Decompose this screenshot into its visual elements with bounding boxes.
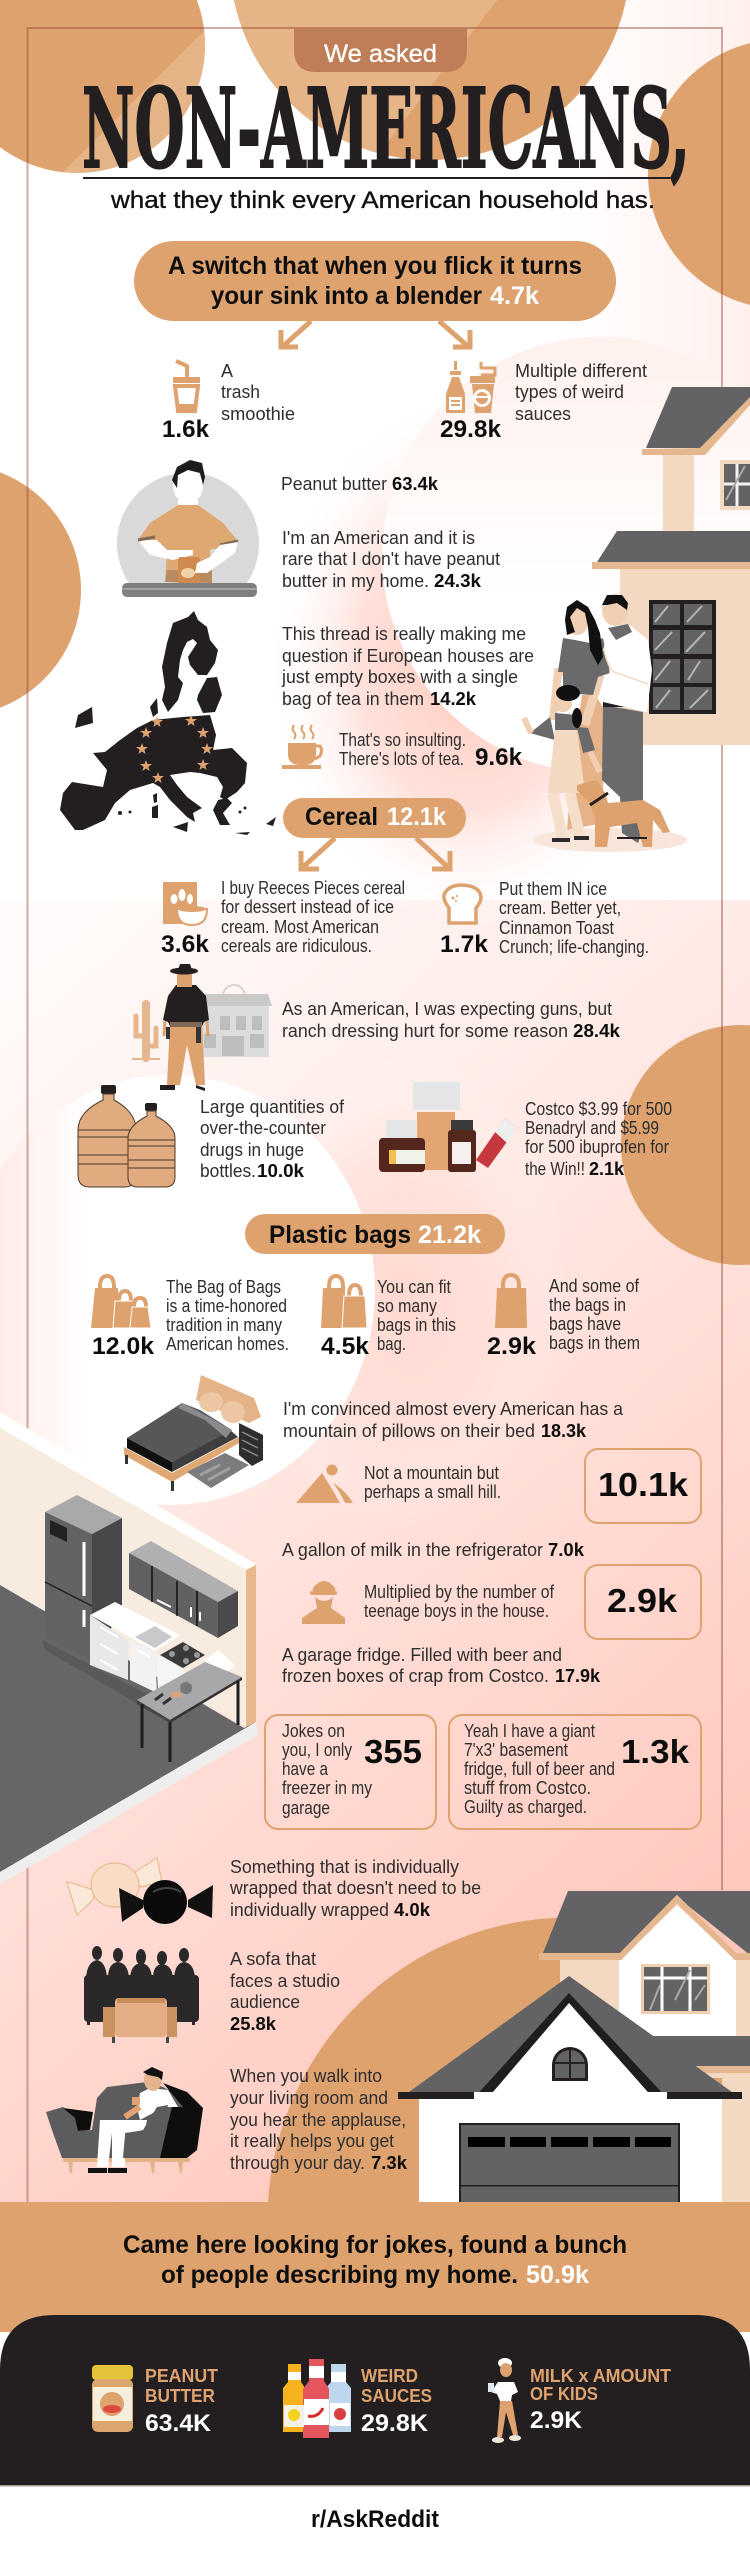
illustration: isometric kitchen	[0, 1412, 258, 1884]
item: weird sauces: 29.8k	[440, 416, 502, 443]
text: garage fridge	[282, 1645, 601, 1686]
text: ranch dressing	[282, 999, 621, 1041]
heading pill: sink blender	[134, 241, 616, 321]
callout: freezer 355	[265, 1715, 436, 1829]
text: applause: it really helps you get	[230, 2131, 394, 2151]
item: many bags: You can fit	[377, 1277, 451, 1297]
text: european houses: question if European houses are	[282, 646, 534, 666]
heading pill: cereal: 12.1k	[387, 803, 446, 831]
heading pill: plastic bags: 21.2k	[418, 1221, 481, 1249]
item: trash smoothie: trash	[221, 382, 260, 402]
text: OTC drugs: Large quantities of	[200, 1097, 345, 1117]
heading pill: cereal	[283, 798, 466, 838]
text: teenage boys: teenage boys in the house.	[364, 1601, 549, 1621]
stat: weird sauces	[283, 2359, 432, 2438]
text: individually wrapped: Something that is individually	[230, 1857, 459, 1877]
icon: three bags	[91, 1276, 151, 1328]
we asked tab	[294, 28, 467, 72]
text: european houses: This thread is really making me	[282, 624, 526, 644]
icon: bread	[444, 885, 481, 923]
text: ranch dressing: 28.4k	[573, 1021, 621, 1041]
text: OTC drugs: over-the-counter	[200, 1118, 326, 1138]
callout: freezer 355: 355	[364, 1733, 422, 1770]
icon: peanut butter jar	[92, 2365, 133, 2432]
callout: basement fridge 1.3k: fridge, full of beer and	[464, 1759, 615, 1779]
callout: 10.1k: 10.1k	[598, 1466, 689, 1503]
item: Reeces Pieces cereal: for dessert instead of ice	[221, 897, 394, 917]
callout: freezer 355: freezer in my	[282, 1778, 372, 1798]
callout: freezer 355: you, I only	[282, 1740, 352, 1760]
item: trash smoothie	[162, 361, 295, 443]
stat: peanut butter: BUTTER	[145, 2386, 215, 2406]
stat: peanut butter: PEANUT	[145, 2366, 218, 2386]
text: applause: your living room and	[230, 2088, 388, 2108]
icon: small hill	[296, 1464, 353, 1503]
text: garage fridge: frozen boxes of crap from Costco.	[282, 1666, 549, 1686]
text: small hill: Not a mountain but	[364, 1463, 499, 1483]
item: bags in bags: bags in them	[549, 1333, 640, 1353]
illustration: house with family	[524, 387, 750, 852]
text: studio audience: audience	[230, 1992, 300, 2012]
item: bag of bags: tradition in many	[166, 1315, 282, 1335]
stat: milk	[488, 2358, 671, 2443]
text: mountain of pillows: I'm convinced almost every American has a	[283, 1399, 624, 1419]
text: individually wrapped: individually wrapped	[230, 1900, 389, 1920]
item: many bags: 4.5k	[321, 1333, 370, 1360]
icon: sauce bottles	[283, 2359, 351, 2438]
text: applause: you hear the applause,	[230, 2110, 406, 2130]
illustration: huge bottles	[78, 1085, 175, 1187]
item: bag of bags: The Bag of Bags	[166, 1277, 281, 1297]
text: ranch dressing: As an American, I was expecting guns, but	[282, 999, 612, 1019]
stat: milk: MILK x AMOUNT	[530, 2366, 671, 2386]
item: weird sauces	[440, 361, 647, 443]
text: teenage boys	[364, 1582, 555, 1621]
text: mountain of pillows	[283, 1399, 624, 1441]
text: tea comment: 9.6k	[475, 744, 523, 771]
text: Costco medicine	[525, 1099, 672, 1179]
item: many bags: bag.	[377, 1334, 406, 1354]
text: european houses: 14.2k	[430, 689, 477, 709]
panel: top results	[0, 2315, 750, 2486]
item: bag of bags	[91, 1276, 289, 1360]
item: cereal in ice cream: Crunch; life-changing.	[499, 937, 649, 957]
text: american peanut comment: butter in my home.	[282, 571, 429, 591]
text: mountain of pillows: 18.3k	[541, 1421, 587, 1441]
illustration: house with garage	[398, 1891, 750, 2203]
text: studio audience: faces a studio	[230, 1971, 340, 1991]
text: studio audience	[230, 1949, 340, 2034]
text: individually wrapped	[229, 1857, 481, 1920]
text: OTC drugs: bottles.	[200, 1161, 256, 1181]
item: weird sauces: sauces	[515, 404, 571, 424]
icon: cereal box	[163, 882, 207, 925]
item: weird sauces: Multiple different	[515, 361, 647, 381]
item: bags in bags: the bags in	[549, 1295, 626, 1315]
item: bags in bags: And some of	[549, 1276, 640, 1296]
arrows from sink heading	[281, 321, 470, 348]
stat: weird sauces: SAUCES	[361, 2386, 432, 2406]
text: gallon of milk: A gallon of milk in the refrigerator	[282, 1540, 543, 1560]
text: OTC drugs	[200, 1097, 345, 1181]
text: individually wrapped: 4.0k	[394, 1900, 431, 1920]
stat: weird sauces: 29.8K	[361, 2410, 429, 2437]
illustration: cowboy and saloon	[132, 964, 272, 1091]
icon: one bag	[495, 1275, 527, 1328]
text: OTC drugs: 10.0k	[257, 1161, 305, 1181]
text: ranch dressing: ranch dressing hurt for some reason	[282, 1021, 568, 1041]
icon: smoothie cup	[173, 361, 200, 411]
heading pill: plastic bags: Plastic bags	[269, 1221, 411, 1249]
heading pill: sink blender: A switch that when you flick it turns	[168, 252, 582, 280]
callout: basement fridge 1.3k: Guilty as charged.	[464, 1797, 587, 1817]
heading pill: sink blender: your sink into a blender	[211, 282, 482, 310]
item: bag of bags: American homes.	[166, 1334, 289, 1354]
text: OTC drugs: drugs in huge	[200, 1140, 304, 1160]
item: Reeces Pieces cereal: cream. Most American	[221, 917, 379, 937]
text: european houses: bag of tea in them	[282, 689, 424, 709]
text: garage fridge: A garage fridge. Filled with beer and	[282, 1645, 562, 1665]
text: peanut butter: 63.4k	[392, 474, 439, 494]
icon: tea cup	[282, 725, 322, 769]
item: Reeces Pieces cereal: I buy Reeces Pieces cereal	[221, 878, 405, 898]
stat: milk: 2.9K	[530, 2407, 583, 2434]
illustration: wrapped candies	[67, 1858, 213, 1924]
callout: freezer 355: Jokes on	[282, 1721, 345, 1741]
arrows from cereal heading	[301, 838, 450, 869]
subtitle: what they think every American household has.	[110, 187, 655, 214]
heading pill: plastic bags	[245, 1214, 505, 1254]
callout: basement fridge 1.3k	[449, 1715, 701, 1829]
illustration: medicine bottles	[379, 1082, 517, 1172]
band: conclusion: of people describing my home.	[161, 2261, 518, 2289]
text: gallon of milk: 7.0k	[548, 1540, 585, 1560]
item: cereal in ice cream: cream. Better yet,	[499, 898, 621, 918]
item: cereal in ice cream: 1.7k	[440, 931, 489, 958]
item: Reeces Pieces cereal: cereals are ridiculous.	[221, 936, 372, 956]
item: Reeces Pieces cereal: 3.6k	[161, 931, 210, 958]
text: small hill	[364, 1463, 501, 1502]
text: european houses	[281, 624, 534, 709]
source: r/AskReddit	[311, 2506, 439, 2533]
text: Costco medicine: the Win!!	[525, 1159, 585, 1179]
frame	[28, 28, 722, 2202]
stat: milk: OF KIDS	[530, 2384, 598, 2404]
item: many bags	[321, 1276, 456, 1360]
illustration: man opening peanut butter	[117, 460, 259, 597]
band: conclusion	[0, 2202, 750, 2332]
text: american peanut comment: 24.3k	[434, 571, 482, 591]
text: mountain of pillows: mountain of pillows on their bed	[283, 1421, 535, 1441]
icon: two bags	[321, 1276, 367, 1328]
map: Europe with stars	[60, 611, 276, 835]
stat: peanut butter	[92, 2365, 218, 2437]
item: many bags: bags in this	[377, 1315, 456, 1335]
text: Costco medicine: for 500 ibuprofen for	[525, 1137, 669, 1157]
item: cereal in ice cream: Put them IN ice	[499, 879, 607, 899]
text: Costco medicine: Benadryl and $5.99	[525, 1118, 659, 1138]
icon: boy drinking milk	[488, 2358, 521, 2443]
text: applause: through your day.	[230, 2153, 365, 2173]
text: tea comment: That's so insulting.	[339, 730, 466, 750]
text: american peanut comment	[282, 528, 500, 591]
family	[524, 594, 687, 852]
item: Reeces Pieces cereal	[161, 878, 405, 958]
text: studio audience: 25.8k	[230, 2014, 277, 2034]
item: trash smoothie: smoothie	[221, 404, 295, 424]
callout: 2.9k: 2.9k	[607, 1582, 678, 1619]
heading pill: sink blender: 4.7k	[490, 282, 539, 310]
text: teenage boys: Multiplied by the number of	[364, 1582, 555, 1602]
item: trash smoothie: A	[221, 361, 233, 381]
text: peanut butter: Peanut butter	[281, 474, 387, 494]
item: bag of bags: is a time-honored	[166, 1296, 287, 1316]
heading pill: cereal: Cereal	[305, 803, 378, 831]
text: applause: When you walk into	[230, 2066, 382, 2086]
text: tea comment	[339, 730, 523, 771]
text: studio audience: A sofa that	[230, 1949, 316, 1969]
we asked tab: We asked	[324, 40, 437, 68]
text: garage fridge: 17.9k	[555, 1666, 601, 1686]
upper house	[646, 387, 750, 448]
item: weird sauces: types of weird	[515, 382, 624, 402]
text: small hill: perhaps a small hill.	[364, 1482, 501, 1502]
item: cereal in ice cream: Cinnamon Toast	[499, 918, 614, 938]
callout: basement fridge 1.3k: Yeah I have a giant	[464, 1721, 595, 1741]
callout: freezer 355: garage	[282, 1798, 330, 1818]
item: many bags: so many	[377, 1296, 437, 1316]
illustration: sofa and audience	[84, 1946, 199, 2043]
text: tea comment: There's lots of tea.	[339, 749, 464, 769]
text: european houses: just empty boxes with a single	[281, 667, 518, 687]
callout: basement fridge 1.3k: 7'x3' basement	[464, 1740, 568, 1760]
item: bag of bags: 12.0k	[92, 1333, 155, 1360]
item: cereal in ice cream	[440, 879, 649, 958]
text: american peanut comment: I'm an American and it is	[282, 528, 475, 548]
item: bags in bags: bags have	[549, 1314, 621, 1334]
callout: 2.9k	[585, 1565, 701, 1639]
band: conclusion: Came here looking for jokes, found a bunch	[123, 2231, 627, 2259]
illustration: man in armchair	[46, 2067, 203, 2173]
text: Costco medicine: 2.1k	[589, 1159, 625, 1179]
band: conclusion: 50.9k	[526, 2261, 589, 2289]
item: bags in bags: 2.9k	[487, 1333, 537, 1360]
callout: freezer 355: have a	[282, 1759, 329, 1779]
callout: basement fridge 1.3k: 1.3k	[621, 1733, 690, 1770]
stat: peanut butter: 63.4K	[145, 2410, 212, 2437]
illustration: bed	[124, 1375, 263, 1491]
item: bags in bags	[487, 1275, 640, 1360]
text: applause: 7.3k	[371, 2153, 408, 2173]
item: trash smoothie: 1.6k	[162, 416, 210, 443]
text: individually wrapped: wrapped that doesn't need to be	[229, 1878, 481, 1898]
text: peanut butter	[281, 474, 439, 494]
callout: 10.1k	[585, 1449, 701, 1523]
stat: weird sauces: WEIRD	[361, 2366, 418, 2386]
text: applause	[230, 2066, 408, 2173]
text: Costco medicine: Costco $3.99 for 500	[525, 1099, 672, 1119]
icon: sauce bottles	[446, 361, 495, 413]
callout: basement fridge 1.3k: stuff from Costco.	[464, 1778, 591, 1798]
icon: teenage boy	[302, 1581, 345, 1624]
text: american peanut comment: rare that I don't have peanut	[282, 549, 500, 569]
